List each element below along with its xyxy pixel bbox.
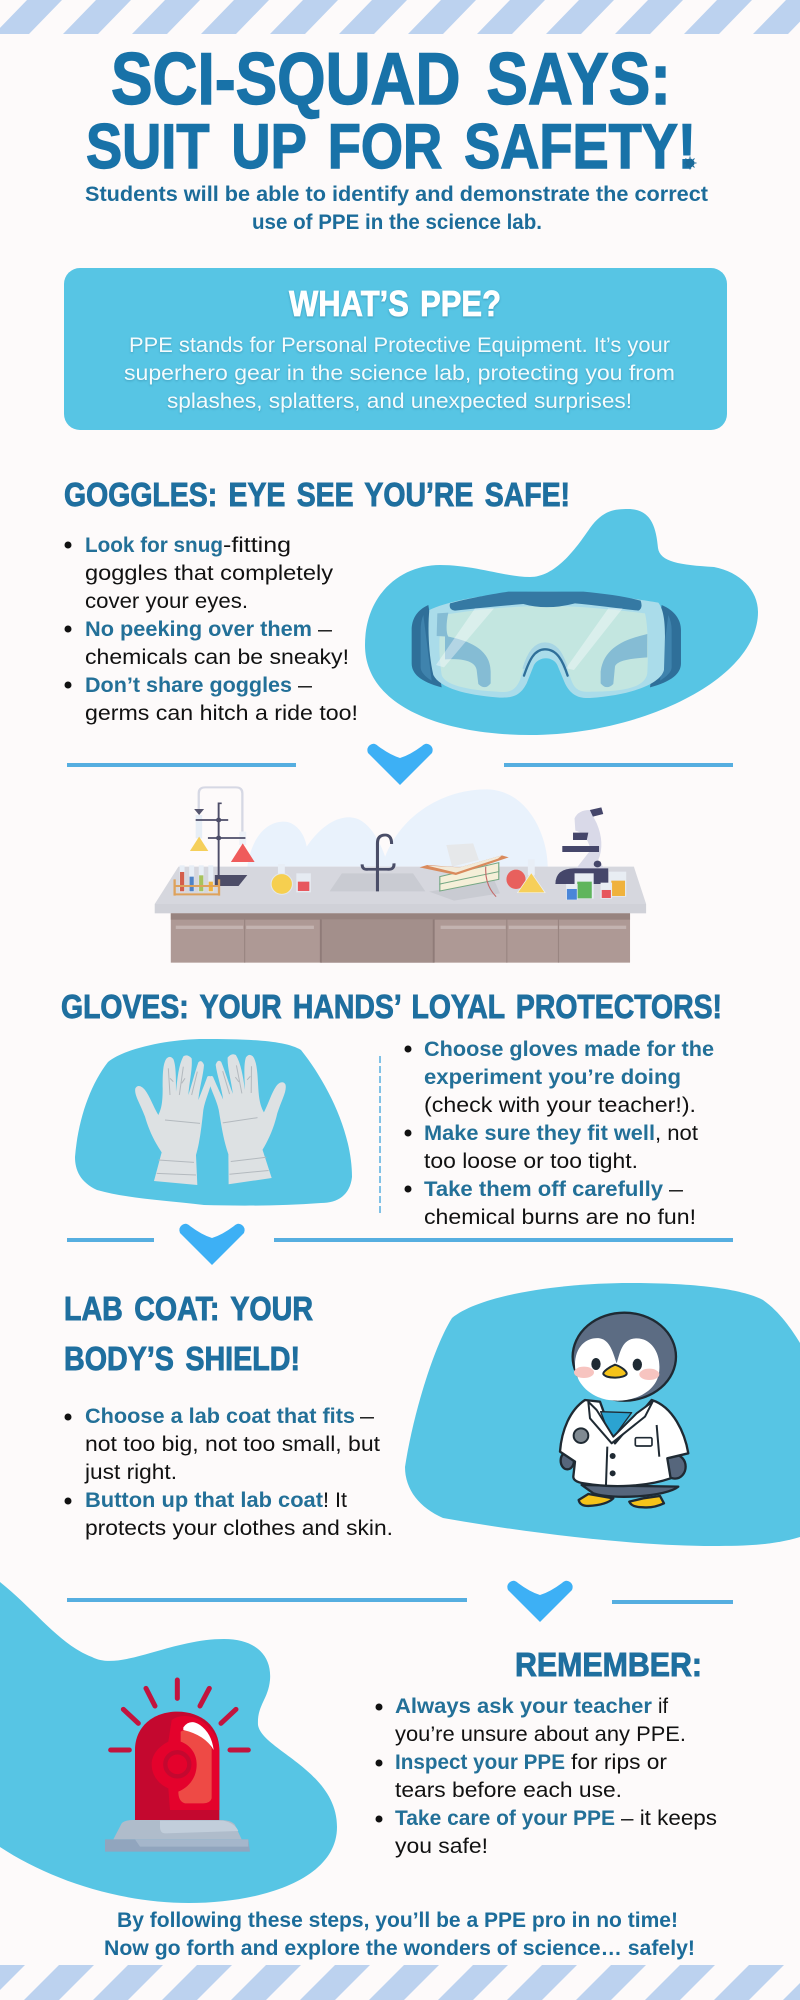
bullet list: goggles: goggles that completely — [85, 562, 334, 585]
bullet list: gloves: Take them off carefully — [424, 1178, 663, 1201]
blob: gloves background — [75, 1039, 352, 1206]
stethoscope and name tag — [574, 1428, 652, 1446]
panel heading: WHAT’S PPE? — [289, 283, 501, 324]
panel body text: superhero gear in the science lab, protecting you from — [124, 362, 675, 385]
bullet list: remember: you’re unsure about any PPE. — [395, 1723, 686, 1746]
bullet list: lab coat: Choose a lab coat that fits — [85, 1405, 355, 1428]
bullet list: gloves: experiment you’re doing — [424, 1066, 681, 1089]
bullet list: goggles: chemicals can be sneaky! — [85, 646, 349, 669]
bullet list: gloves: (check with your teacher!). — [424, 1094, 696, 1117]
dome — [135, 1712, 219, 1820]
countertop — [155, 867, 646, 913]
heading: lab coat: LAB COAT: YOUR — [64, 1290, 313, 1327]
divider: gloves section — [67, 1224, 733, 1265]
undercoat and flippers — [561, 1452, 686, 1497]
panel body text — [124, 334, 675, 413]
sink and faucet — [330, 835, 425, 891]
bullet list: goggles: No peeking over them — [85, 618, 312, 641]
bullet list: gloves: chemical burns are no fun! — [424, 1206, 696, 1229]
bullet list: lab coat: Button up that lab coat — [85, 1489, 323, 1512]
base — [105, 1820, 250, 1852]
bullet list: lab coat: just right. — [84, 1461, 177, 1484]
dashed separator — [379, 1056, 381, 1214]
top striped banner — [0, 0, 800, 34]
closing message: Now go forth and explore the wonders of science… safely! — [104, 1937, 695, 1960]
title: SCI-SQUAD SAYS: — [111, 39, 671, 120]
microscope — [555, 807, 608, 884]
subtitle: use of PPE in the science lab. — [252, 211, 542, 234]
title — [86, 39, 696, 182]
red and yellow flasks — [506, 859, 545, 893]
divider: lab coat section — [67, 1581, 733, 1622]
closing message: By following these steps, you’ll be a PPE pro in no time! — [117, 1909, 678, 1932]
bullet list: remember: tears before each use. — [395, 1779, 622, 1802]
bullet list: remember: Always ask your teacher — [395, 1695, 652, 1718]
heading: remember: REMEMBER: — [515, 1646, 702, 1683]
panel body text: PPE stands for Personal Protective Equipment. It’s your — [129, 334, 670, 357]
bullet list: remember: Take care of your PPE — [395, 1807, 615, 1830]
bullet list: lab coat: not too big, not too small, but — [85, 1433, 380, 1456]
bullet list: goggles: – — [298, 674, 312, 697]
bullet list: remember: – it keeps — [621, 1807, 717, 1830]
icon: latex gloves — [135, 1052, 291, 1185]
divider: goggles section — [67, 744, 733, 785]
bullet list: lab coat — [64, 1405, 393, 1540]
retort stand with flasks — [190, 787, 255, 886]
bullet list: remember: Inspect your PPE — [395, 1751, 565, 1774]
bullet list: gloves: – — [669, 1178, 683, 1201]
stack of books — [420, 843, 509, 901]
bullet list: gloves: Choose gloves made for the — [424, 1038, 714, 1061]
closing message — [104, 1909, 695, 1960]
bullet list: gloves: Make sure they fit well — [424, 1122, 655, 1145]
icon: small virus speck — [684, 156, 696, 170]
bullet list: goggles: -fitting — [223, 534, 291, 557]
panel body text: splashes, splatters, and unexpected surprises! — [167, 390, 632, 413]
bullet list: remember: you safe! — [395, 1835, 488, 1858]
background hills — [247, 789, 548, 867]
heading: goggles: GOGGLES: EYE SEE YOU’RE SAFE! — [64, 476, 570, 513]
heading: lab coat — [64, 1290, 313, 1377]
bullet list: lab coat: – — [360, 1405, 374, 1428]
bullet list: goggles: Don’t share goggles — [85, 674, 292, 697]
bullet list: goggles: germs can hitch a ride too! — [85, 702, 358, 725]
feet — [579, 1494, 664, 1507]
light rays — [111, 1680, 248, 1750]
icon: penguin in lab coat — [560, 1313, 688, 1507]
test tube rack — [173, 865, 220, 896]
coat — [560, 1400, 688, 1486]
icon: safety goggles — [412, 592, 681, 698]
bullet list: remember — [376, 1695, 717, 1858]
blob: goggles background — [365, 509, 758, 735]
bullet list: goggles: – — [318, 618, 332, 641]
bullet list: gloves — [404, 1038, 714, 1229]
bullet list: lab coat: protects your clothes and skin. — [85, 1517, 393, 1540]
coloured beakers — [566, 872, 626, 900]
bullet list: goggles — [64, 534, 358, 725]
blob: lab coat background — [405, 1283, 800, 1546]
round flask and beaker — [271, 864, 311, 894]
subtitle: Students will be able to identify and demonstrate the correct — [85, 183, 708, 206]
icon: red warning siren — [105, 1680, 250, 1852]
title: SUIT UP FOR SAFETY! — [86, 112, 696, 182]
bullet list: remember: if — [658, 1695, 668, 1718]
illustration: lab bench — [155, 787, 646, 963]
subtitle — [85, 183, 708, 234]
heading: lab coat: BODY’S SHIELD! — [64, 1340, 300, 1377]
bullet list: goggles: Look for snug — [85, 534, 223, 557]
bottom striped banner — [0, 1965, 800, 2000]
face — [574, 1358, 659, 1380]
bullet list: lab coat: ! It — [323, 1489, 347, 1512]
bullet list: gloves: , not — [655, 1122, 698, 1145]
bullet list: gloves: too loose or too tight. — [424, 1150, 638, 1173]
panel: what's PPE — [64, 268, 727, 430]
bullet list: goggles: cover your eyes. — [85, 590, 248, 613]
bullet list: remember: for rips or — [571, 1751, 667, 1774]
cabinets — [171, 913, 630, 963]
head — [573, 1313, 676, 1401]
blob: siren background — [0, 1582, 337, 1903]
